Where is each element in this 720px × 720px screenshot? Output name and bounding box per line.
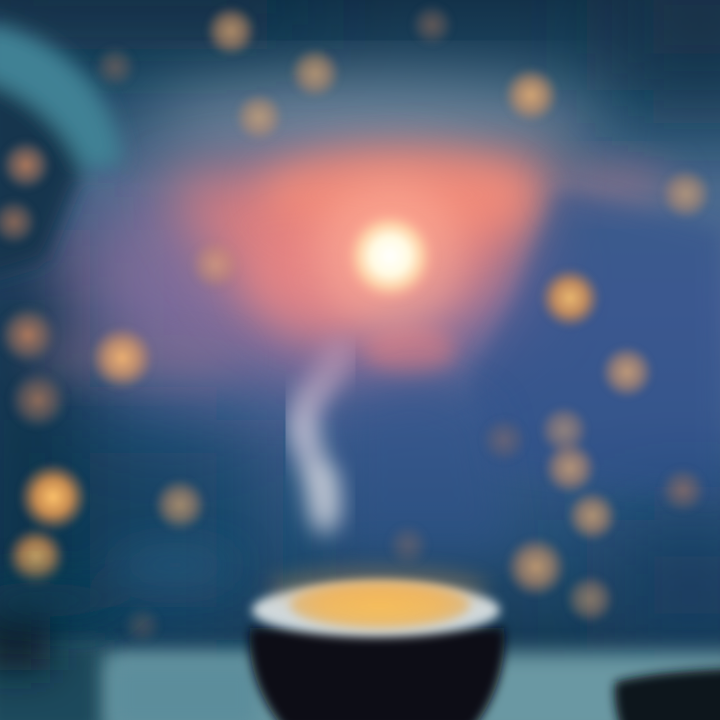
sun [318, 184, 462, 328]
bokeh: left column [0, 139, 52, 191]
mountain ridge: right blue slope [470, 190, 720, 500]
planet arc at top left [0, 22, 122, 280]
steam rising from bowl [303, 355, 338, 520]
soup glow [268, 568, 488, 608]
small dark bowl at right edge [614, 668, 720, 720]
bokeh: upper row [205, 5, 257, 57]
main bowl [250, 568, 505, 720]
table surface [0, 640, 720, 720]
pale haze above the glow [140, 84, 600, 156]
glowing soup [290, 581, 470, 629]
bowl body [250, 628, 505, 720]
nebula: pink and coral glow [20, 147, 675, 385]
bokeh: right side [660, 168, 712, 220]
mountain ridge: lower centre [340, 376, 510, 550]
bowl rim [252, 583, 500, 637]
dark foreground shadows [0, 551, 235, 670]
